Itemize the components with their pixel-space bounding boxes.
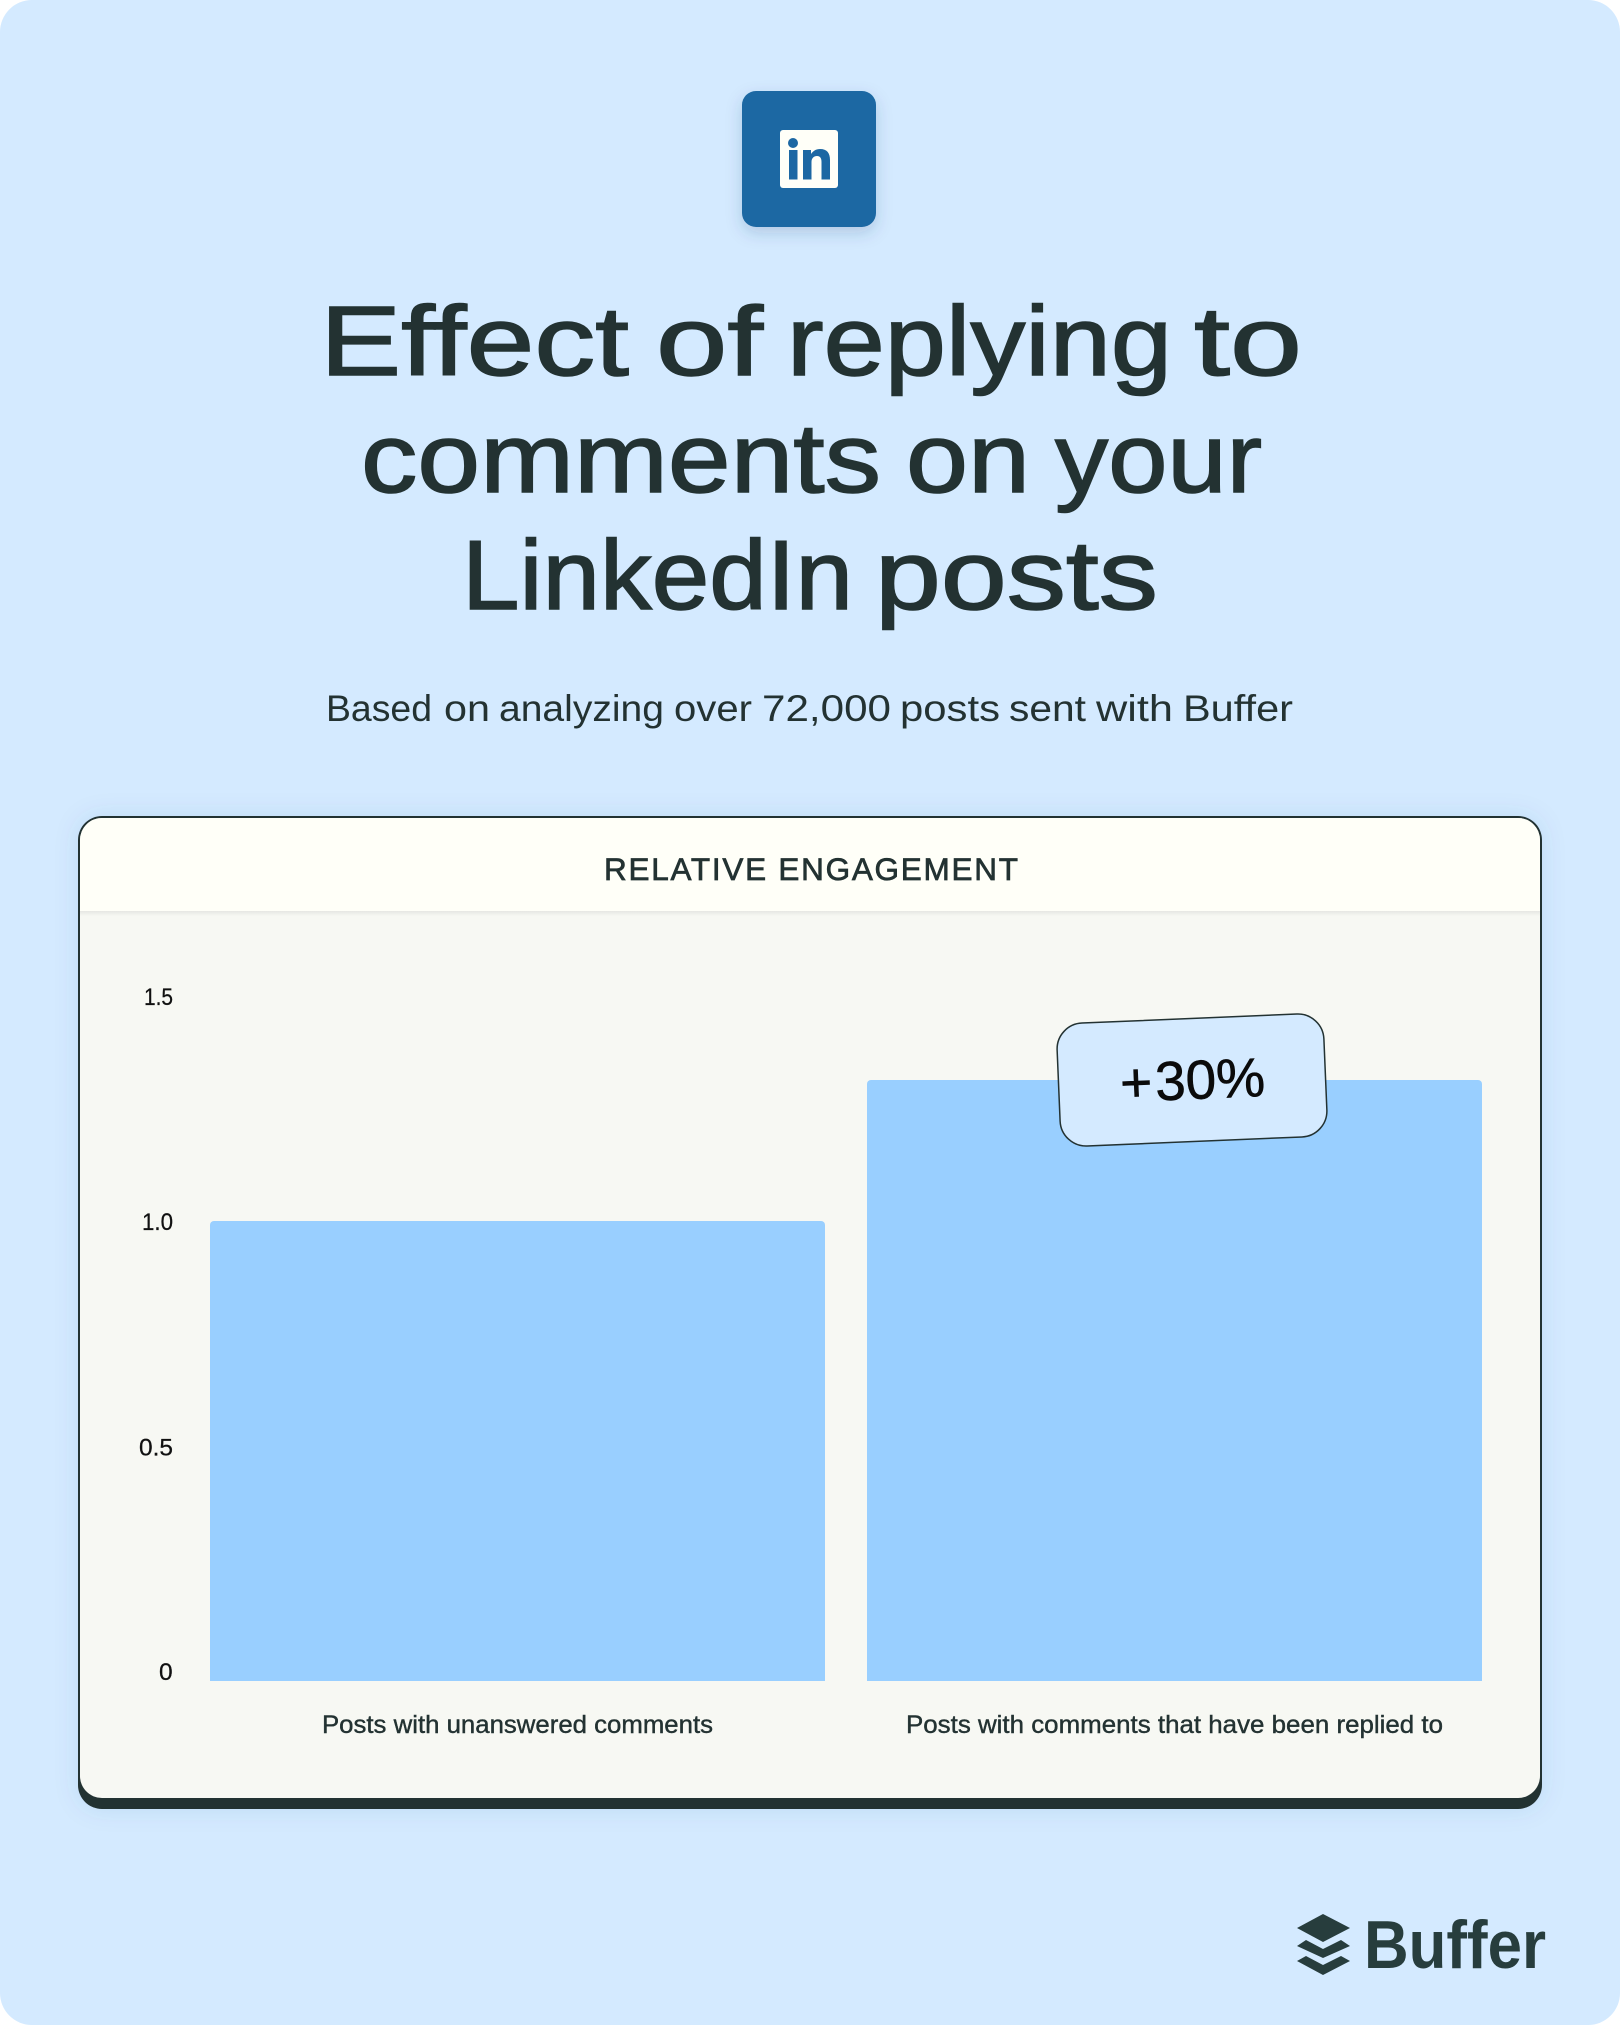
title: replying xyxy=(787,286,1172,396)
subtitle xyxy=(326,688,1293,729)
wordmark: Buffer xyxy=(1364,1907,1546,1983)
Buffer logo xyxy=(1297,1907,1546,1983)
title: to xyxy=(1194,286,1302,396)
callout: +30% xyxy=(1056,1013,1328,1147)
title: LinkedIn xyxy=(462,520,853,630)
y axis labels: 0 xyxy=(159,1659,173,1686)
label: replied comments: Posts with comments that have been replied to xyxy=(906,1711,1443,1739)
subtitle: analyzing xyxy=(499,688,664,729)
chart heading: RELATIVE ENGAGEMENT xyxy=(604,851,1018,887)
subtitle: Buffer xyxy=(1183,688,1293,729)
y axis labels: 1.5 xyxy=(144,984,173,1011)
y axis labels xyxy=(139,984,173,1686)
y axis labels: 0.5 xyxy=(139,1434,173,1462)
title: your xyxy=(1055,403,1262,513)
subtitle: posts xyxy=(900,688,1000,729)
icon: LinkedIn logo xyxy=(742,91,876,227)
subtitle: sent xyxy=(1009,688,1087,729)
subtitle: 72,000 xyxy=(762,688,891,729)
panel: chart card xyxy=(78,816,1542,1809)
title: on xyxy=(906,403,1030,513)
title: Effect xyxy=(320,286,629,396)
title xyxy=(320,286,1302,630)
subtitle: over xyxy=(674,688,752,729)
title: of xyxy=(656,286,764,396)
icon: Buffer stack xyxy=(1297,1914,1350,1975)
title: comments xyxy=(361,403,881,513)
subtitle: on xyxy=(444,688,490,729)
bar: replied comments xyxy=(867,1080,1482,1681)
label: unanswered comments: Posts with unanswered comments xyxy=(322,1711,713,1739)
title: posts xyxy=(875,520,1158,630)
callout: +30%: 30% xyxy=(1154,1046,1266,1113)
subtitle: Based xyxy=(326,688,432,729)
subtitle: with xyxy=(1095,688,1173,729)
callout: +30%: + xyxy=(1119,1051,1153,1114)
y axis labels: 1.0 xyxy=(142,1209,173,1236)
bar: unanswered comments xyxy=(210,1221,825,1681)
